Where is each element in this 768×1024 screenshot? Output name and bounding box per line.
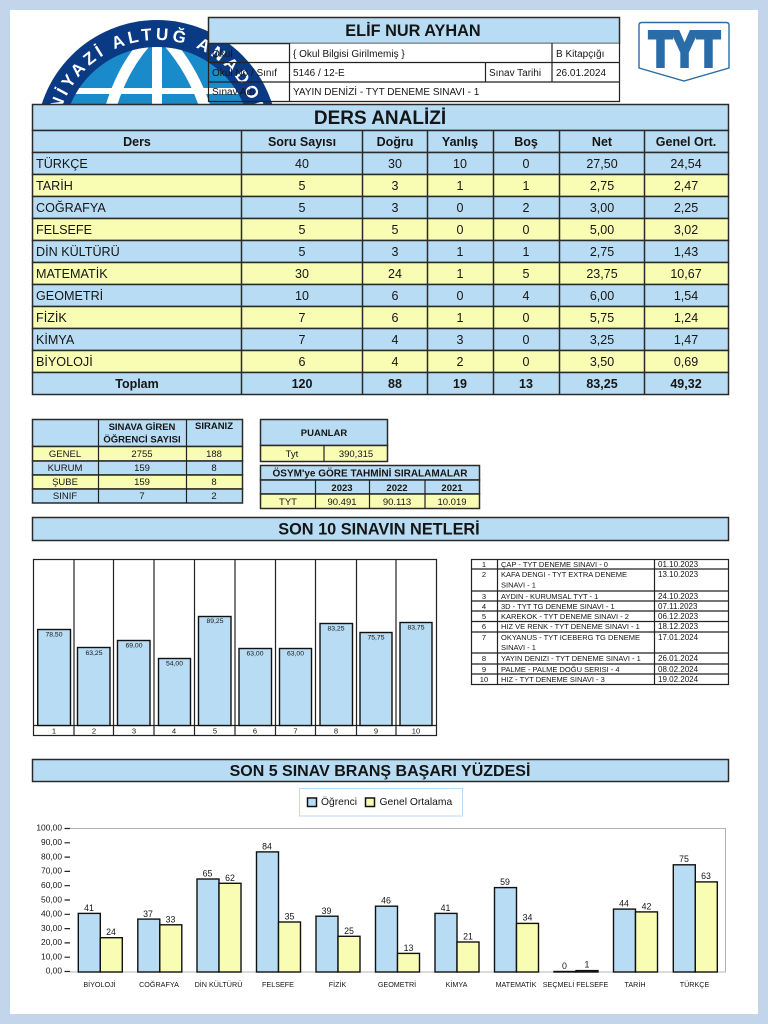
totals row: 83,25 — [586, 377, 618, 391]
subject names: MATEMATİK — [36, 267, 108, 281]
bar axis labels: 7 — [293, 726, 298, 736]
bar axis labels: 4 — [172, 726, 176, 736]
exam names: KAREKOK - TYT DENEME SINAVI - 2 — [501, 612, 629, 621]
info labels: Okul — [212, 49, 233, 60]
category labels: MATEMATİK — [496, 980, 537, 989]
exam names: OKYANUS - TYT ICEBERG TG DENEME — [501, 633, 640, 642]
category labels: TARİH — [624, 980, 646, 989]
totals row: 49,32 — [670, 377, 702, 391]
category labels: DİN KÜLTÜRÜ — [195, 980, 242, 989]
subject values: 1,47 — [674, 333, 698, 347]
value labels: 84 — [262, 842, 272, 852]
exam numbers — [480, 560, 488, 684]
totals row: 88 — [388, 377, 402, 391]
y axis: 30,00 — [41, 923, 62, 933]
subject values: 0 — [457, 201, 464, 215]
value labels: 42 — [642, 902, 651, 912]
exam dates: 06.12.2023 — [658, 612, 699, 621]
category labels: SEÇMELİ FELSEFE — [543, 980, 608, 989]
column headers — [123, 135, 716, 149]
y axis: 60,00 — [41, 880, 62, 890]
subject names: TÜRKÇE — [36, 157, 88, 171]
bar chart: branch success — [36, 822, 726, 989]
value labels: 25 — [344, 926, 354, 936]
subject values: 24 — [388, 267, 402, 281]
exam names: 3D - TYT TG DENEME SINAVI - 1 — [501, 602, 615, 611]
subject values: 7 — [299, 311, 306, 325]
subject values: 5 — [299, 245, 306, 259]
value labels: 24 — [106, 927, 116, 937]
column headers: Soru Sayısı — [268, 135, 336, 149]
subject values: 2 — [523, 201, 530, 215]
value labels: 59 — [500, 877, 510, 887]
ranking headers: ÖĞRENCİ SAYISI — [103, 434, 181, 446]
subject values: 0 — [523, 355, 530, 369]
value labels: 39 — [322, 906, 331, 916]
exam numbers: 8 — [482, 654, 486, 663]
subject values: 1 — [523, 179, 530, 193]
totals row: 13 — [519, 377, 533, 391]
panel: scores: Tyt — [286, 449, 299, 460]
subject values: 6 — [392, 289, 399, 303]
subject values: 5 — [299, 201, 306, 215]
icon: TYT logo: TYT — [649, 23, 720, 77]
subject values: 3 — [457, 333, 464, 347]
heading: son 10 sinavin netleri — [32, 518, 728, 540]
chart legend: Öğrenci — [321, 796, 357, 808]
subject names: DİN KÜLTÜRÜ — [36, 245, 120, 259]
subject values: 27,50 — [586, 157, 618, 171]
exam names: ÇAP - TYT DENEME SINAVI - 0 — [501, 560, 608, 569]
exam numbers: 1 — [482, 560, 486, 569]
subject values: 3,00 — [590, 201, 614, 215]
bar value labels — [45, 618, 425, 668]
bar value labels: 69,00 — [125, 642, 143, 650]
panel: scores: 390,315 — [339, 449, 373, 460]
heading: son 5 sinav brans basari yuzdesi — [32, 760, 728, 782]
subject names: FİZİK — [36, 311, 67, 325]
bar axis labels: 9 — [374, 726, 378, 736]
bar axis labels: 10 — [412, 726, 420, 736]
value labels — [84, 842, 711, 971]
value labels: 41 — [441, 903, 450, 913]
exam dates: 13.10.2023 — [658, 570, 699, 579]
subject values: 1 — [457, 245, 464, 259]
column headers: Yanlış — [442, 135, 478, 149]
student name: ELİF NUR AYHAN — [345, 22, 481, 40]
bar axis labels — [52, 726, 420, 736]
ranking values: 2 — [211, 491, 217, 502]
subject values: 30 — [295, 267, 309, 281]
panel: estimated rankings: 10.019 — [437, 497, 467, 508]
exam numbers: 7 — [482, 633, 486, 642]
value labels: 1 — [585, 960, 590, 970]
exam names: HIZ - TYT DENEME SINAVI - 3 — [501, 675, 605, 684]
subject values: 5,00 — [590, 223, 614, 237]
ranking headers: SIRANIZ — [195, 421, 233, 432]
subject values: 0 — [523, 223, 530, 237]
panel: estimated rankings — [260, 466, 480, 508]
panel: estimated rankings: 90.113 — [383, 497, 411, 508]
ranking values: KURUM — [48, 463, 82, 474]
subject values: 0 — [523, 311, 530, 325]
panel: student info — [208, 18, 620, 102]
exam dates: 26.01.2024 — [658, 654, 699, 663]
exam names — [501, 560, 641, 684]
y axis: 80,00 — [41, 852, 62, 862]
exam numbers: 6 — [482, 622, 486, 631]
subject values: 4 — [392, 333, 399, 347]
subject values: 5 — [523, 267, 530, 281]
value labels: 21 — [463, 932, 473, 942]
ranking values: 2755 — [131, 449, 153, 460]
exam numbers: 10 — [480, 675, 488, 684]
subject names: FELSEFE — [36, 223, 92, 237]
bar value labels: 63,00 — [287, 650, 304, 658]
subject values: 23,75 — [586, 267, 618, 281]
heading: son 10 sinavin netleri: SON 10 SINAVIN NETLERİ — [278, 520, 480, 538]
subject values: 2,25 — [674, 201, 698, 215]
subject values: 0 — [523, 333, 530, 347]
ranking values: 159 — [134, 477, 150, 488]
column headers: Doğru — [377, 135, 413, 149]
y axis: 50,00 — [41, 894, 62, 904]
exam dates: 17.01.2024 — [658, 633, 699, 642]
y axis: 70,00 — [41, 866, 62, 876]
info labels: { Okul Bilgisi Girilmemiş } — [293, 49, 405, 60]
bar axis labels: 6 — [253, 726, 257, 736]
ranking values: GENEL — [49, 449, 81, 460]
exam names: SINAVI - 1 — [501, 580, 536, 590]
ranking values: 188 — [206, 449, 222, 460]
exam dates: 24.10.2023 — [658, 592, 699, 601]
ranking values: 159 — [134, 463, 150, 474]
exam names: AYDIN - KURUMSAL TYT - 1 — [501, 592, 598, 601]
subject values: 6 — [392, 311, 399, 325]
subject values: 3,50 — [590, 355, 614, 369]
info labels: Okul No / Sınıf — [212, 68, 277, 79]
exam numbers: 2 — [482, 570, 486, 579]
subject values: 10 — [453, 157, 467, 171]
subject values: 4 — [523, 289, 530, 303]
subject values: 1,24 — [674, 311, 698, 325]
info labels: YAYIN DENİZİ - TYT DENEME SINAVI - 1 — [293, 85, 480, 98]
panel: exam list table — [472, 560, 728, 684]
student bars — [78, 852, 695, 972]
info labels: 26.01.2024 — [556, 68, 606, 79]
subject values: 10 — [295, 289, 309, 303]
subject values: 0 — [523, 157, 530, 171]
subject values: 40 — [295, 157, 309, 171]
subject values: 3 — [392, 201, 399, 215]
value labels: 13 — [404, 943, 413, 953]
ranking values — [48, 449, 222, 502]
exam numbers: 9 — [482, 665, 486, 674]
value labels: 35 — [285, 912, 294, 922]
subject values: 1 — [457, 311, 464, 325]
bar value labels: 78,50 — [45, 632, 63, 638]
panel: ranking table — [32, 420, 242, 503]
chart legend — [300, 788, 462, 816]
subject names: COĞRAFYA — [36, 200, 106, 215]
icon: school logo: NİYAZİ ALTUĞ ANADOLU — [50, 27, 264, 104]
subject values: 2,75 — [590, 179, 614, 193]
category labels: FELSEFE — [262, 980, 294, 989]
bar value labels: 89,25 — [206, 618, 224, 625]
info labels — [212, 49, 606, 98]
subject values: 5 — [299, 179, 306, 193]
exam names: KAFA DENGI - TYT EXTRA DENEME — [501, 570, 627, 579]
subject values: 0,69 — [674, 355, 698, 369]
bar axis labels: 1 — [52, 726, 56, 736]
y axis: 90,00 — [41, 837, 62, 847]
subject values: 6,00 — [590, 289, 614, 303]
exam dates: 19.02.2024 — [658, 675, 699, 684]
ranking values: 8 — [211, 463, 217, 474]
category labels: GEOMETRİ — [378, 980, 416, 989]
value labels: 75 — [679, 854, 689, 864]
bar value labels: 83,75 — [407, 624, 425, 632]
y axis: 0,00 — [46, 966, 62, 976]
bar chart: last 10 exams — [34, 560, 436, 736]
category labels: KİMYA — [446, 980, 468, 989]
subject names: GEOMETRİ — [36, 289, 103, 303]
exam dates: 18.12.2023 — [658, 622, 699, 631]
column headers: Net — [592, 135, 613, 149]
icon: school logo — [42, 20, 272, 104]
subject values: 1 — [457, 267, 464, 281]
category labels — [83, 980, 709, 989]
exam numbers: 4 — [482, 602, 486, 611]
subject values: 4 — [392, 355, 399, 369]
bar axis labels: 3 — [132, 726, 136, 736]
exam dates: 08.02.2024 — [658, 665, 699, 674]
heading: son 5 sinav brans basari yuzdesi: SON 5 SINAV BRANŞ BAŞARI YÜZDESİ — [230, 761, 530, 780]
ranking values: 8 — [211, 477, 217, 488]
category labels: FİZİK — [329, 980, 346, 989]
totals row: Toplam — [115, 377, 159, 391]
subject values: 24,54 — [670, 157, 702, 171]
totals row: 19 — [453, 377, 467, 391]
info labels: Sınav Adı — [212, 87, 255, 98]
value labels: 63 — [701, 871, 711, 881]
subject values: 1 — [457, 179, 464, 193]
exam names: PALME - PALME DOĞU SERISI - 4 — [501, 665, 620, 674]
y axis: 10,00 — [41, 952, 62, 962]
bar value labels: 63,00 — [246, 650, 264, 658]
y axis: 40,00 — [41, 908, 62, 918]
exam names: SINAVI - 1 — [501, 643, 536, 652]
subject values: 1,43 — [674, 245, 698, 259]
subject values: 30 — [388, 157, 402, 171]
panel: estimated rankings: 2023 — [331, 483, 353, 494]
exam names: HIZ VE RENK - TYT DENEME SINAVI - 1 — [501, 622, 640, 631]
value labels: 33 — [166, 914, 175, 924]
subject values: 3 — [392, 245, 399, 259]
ranking headers: SINAVA GİREN — [109, 422, 176, 433]
panel: estimated rankings: 2022 — [386, 483, 408, 494]
column headers: Ders — [123, 135, 151, 149]
value labels: 34 — [523, 912, 532, 922]
subject values: 5 — [299, 223, 306, 237]
value labels: 0 — [562, 961, 567, 971]
bar axis labels: 8 — [334, 726, 338, 736]
panel: estimated rankings: TYT — [279, 497, 297, 508]
info labels: Sınav Tarihi — [489, 68, 541, 79]
category labels: BİYOLOJİ — [83, 980, 116, 989]
totals row: 120 — [292, 377, 312, 391]
bar axis labels: 5 — [213, 726, 217, 736]
bar value labels: 75,75 — [367, 634, 385, 642]
panel: scores: PUANLAR — [301, 428, 347, 439]
column headers: Genel Ort. — [656, 135, 716, 149]
y axis: 20,00 — [41, 937, 62, 947]
exam numbers: 5 — [482, 612, 486, 621]
subject values: 0 — [457, 223, 464, 237]
subject values: 1,54 — [674, 289, 698, 303]
exam dates: 07.11.2023 — [658, 602, 698, 611]
ranking values: SINIF — [53, 491, 77, 502]
bar value labels: 54,00 — [166, 660, 183, 668]
y axis: 100,00 — [36, 822, 62, 832]
table title: DERS ANALİZİ — [314, 108, 446, 129]
subject values: 0 — [457, 289, 464, 303]
subject values: 7 — [299, 333, 306, 347]
plot frame — [70, 828, 726, 972]
info labels: B Kitapçığı — [556, 49, 604, 60]
ranking values: 7 — [139, 491, 145, 502]
subject values: 3 — [392, 179, 399, 193]
subject values: 2,75 — [590, 245, 614, 259]
exam dates — [658, 560, 699, 684]
exam numbers: 3 — [482, 592, 486, 601]
value labels: 41 — [84, 903, 94, 913]
subject values: 1 — [523, 245, 530, 259]
subject names — [36, 157, 120, 369]
panel: scores — [260, 420, 388, 462]
chart legend: Genel Ortalama — [380, 797, 452, 808]
subject values: 5,75 — [590, 311, 614, 325]
subject values: 5 — [392, 223, 399, 237]
subject names: TARİH — [36, 179, 73, 193]
column headers: Boş — [514, 135, 538, 149]
panel: estimated rankings: 2021 — [441, 483, 463, 494]
panel: estimated rankings: ÖSYM'ye GÖRE TAHMİNİ SIRALAMALAR — [273, 466, 468, 480]
info labels: 5146 / 12-E — [293, 68, 345, 79]
y axis — [36, 822, 70, 976]
exam names: YAYIN DENIZI - TYT DENEME SINAVI - 1 — [501, 654, 641, 663]
bar value labels: 83,25 — [327, 626, 345, 632]
subject names: KİMYA — [36, 333, 75, 347]
subject values: 2,47 — [674, 179, 698, 193]
ranking values: ŞUBE — [52, 477, 78, 488]
panel: ders analizi table — [32, 104, 728, 394]
totals row — [115, 377, 702, 391]
value labels: 37 — [143, 909, 153, 919]
bar value labels: 63,25 — [85, 650, 103, 657]
subject names: BİYOLOJİ — [36, 355, 93, 369]
panel: estimated rankings: 90.491 — [327, 497, 357, 508]
subject values — [295, 157, 702, 369]
subject values: 10,67 — [670, 267, 702, 281]
value labels: 65 — [203, 868, 212, 878]
subject values: 2 — [457, 355, 464, 369]
value labels: 62 — [225, 873, 235, 883]
ranking headers — [103, 421, 233, 446]
table title — [32, 104, 728, 130]
category labels: COĞRAFYA — [139, 980, 179, 989]
subject values: 3,25 — [590, 333, 614, 347]
bars — [38, 616, 432, 726]
subject values: 6 — [299, 355, 306, 369]
subject values: 3,02 — [674, 223, 698, 237]
value labels: 44 — [619, 898, 629, 908]
value labels: 46 — [381, 896, 391, 906]
bar axis labels: 2 — [92, 726, 96, 736]
category labels: TÜRKÇE — [680, 980, 709, 989]
exam dates: 01.10.2023 — [658, 560, 699, 569]
average bars — [100, 882, 717, 972]
table rows — [32, 130, 728, 394]
